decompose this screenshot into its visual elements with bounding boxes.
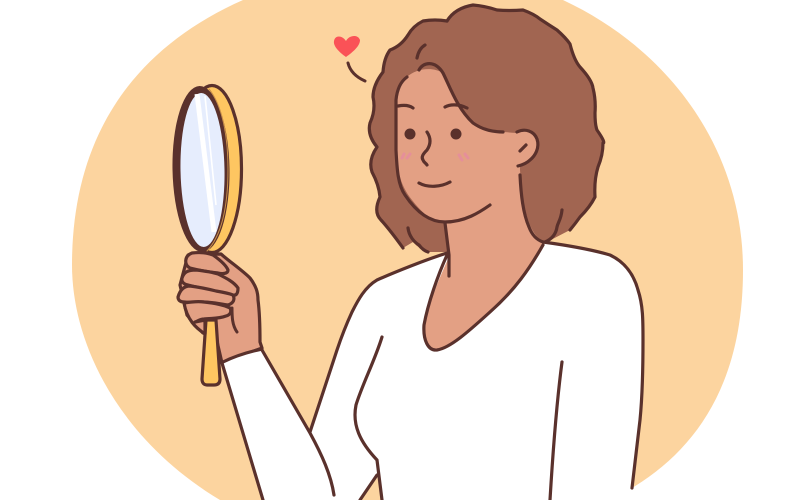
ear inner (520, 145, 526, 151)
neck and chest skin (424, 170, 545, 350)
knuckle crease (232, 308, 237, 332)
hand holding mirror handle (178, 253, 262, 385)
side seam (550, 362, 562, 500)
body in white sweater (262, 242, 643, 500)
palm (180, 254, 262, 363)
sleeve lower edge (222, 363, 263, 500)
sleeve upper edge (262, 350, 334, 495)
neckline (424, 245, 543, 350)
mirror glass (179, 93, 226, 247)
waist line (360, 475, 377, 500)
ear (517, 130, 538, 166)
face (396, 69, 538, 222)
neck right line (520, 175, 543, 242)
right shoulder and side (543, 242, 643, 488)
fingers (178, 253, 238, 334)
mirror gold back (182, 86, 242, 252)
chest line (355, 337, 382, 500)
mirror highlights (197, 94, 216, 232)
hand mirror (171, 86, 242, 252)
mirror handle (202, 320, 220, 385)
icon: heart (334, 36, 365, 81)
hair strand (417, 45, 425, 58)
left eyebrow (398, 105, 413, 108)
neck left line (445, 223, 449, 276)
sleeve (222, 349, 334, 500)
clothing line work (222, 242, 643, 500)
fringe (419, 64, 503, 132)
woman's hair back (369, 5, 604, 252)
mouth (419, 182, 450, 186)
mirror gold sliver (207, 89, 228, 251)
nose (422, 132, 430, 165)
hair right curl (545, 210, 562, 242)
left shoulder (310, 253, 447, 432)
face outline (396, 77, 490, 222)
hair outline (447, 5, 604, 230)
blush marks (402, 154, 468, 160)
gap between arm and waist (360, 475, 382, 500)
right eyebrow (445, 105, 467, 108)
hair left outline (369, 20, 447, 248)
eyes (404, 128, 462, 140)
hair and face line work (369, 5, 604, 276)
mirror dark rim (171, 86, 231, 252)
cuff (223, 349, 262, 362)
hair lower curl (408, 228, 428, 252)
